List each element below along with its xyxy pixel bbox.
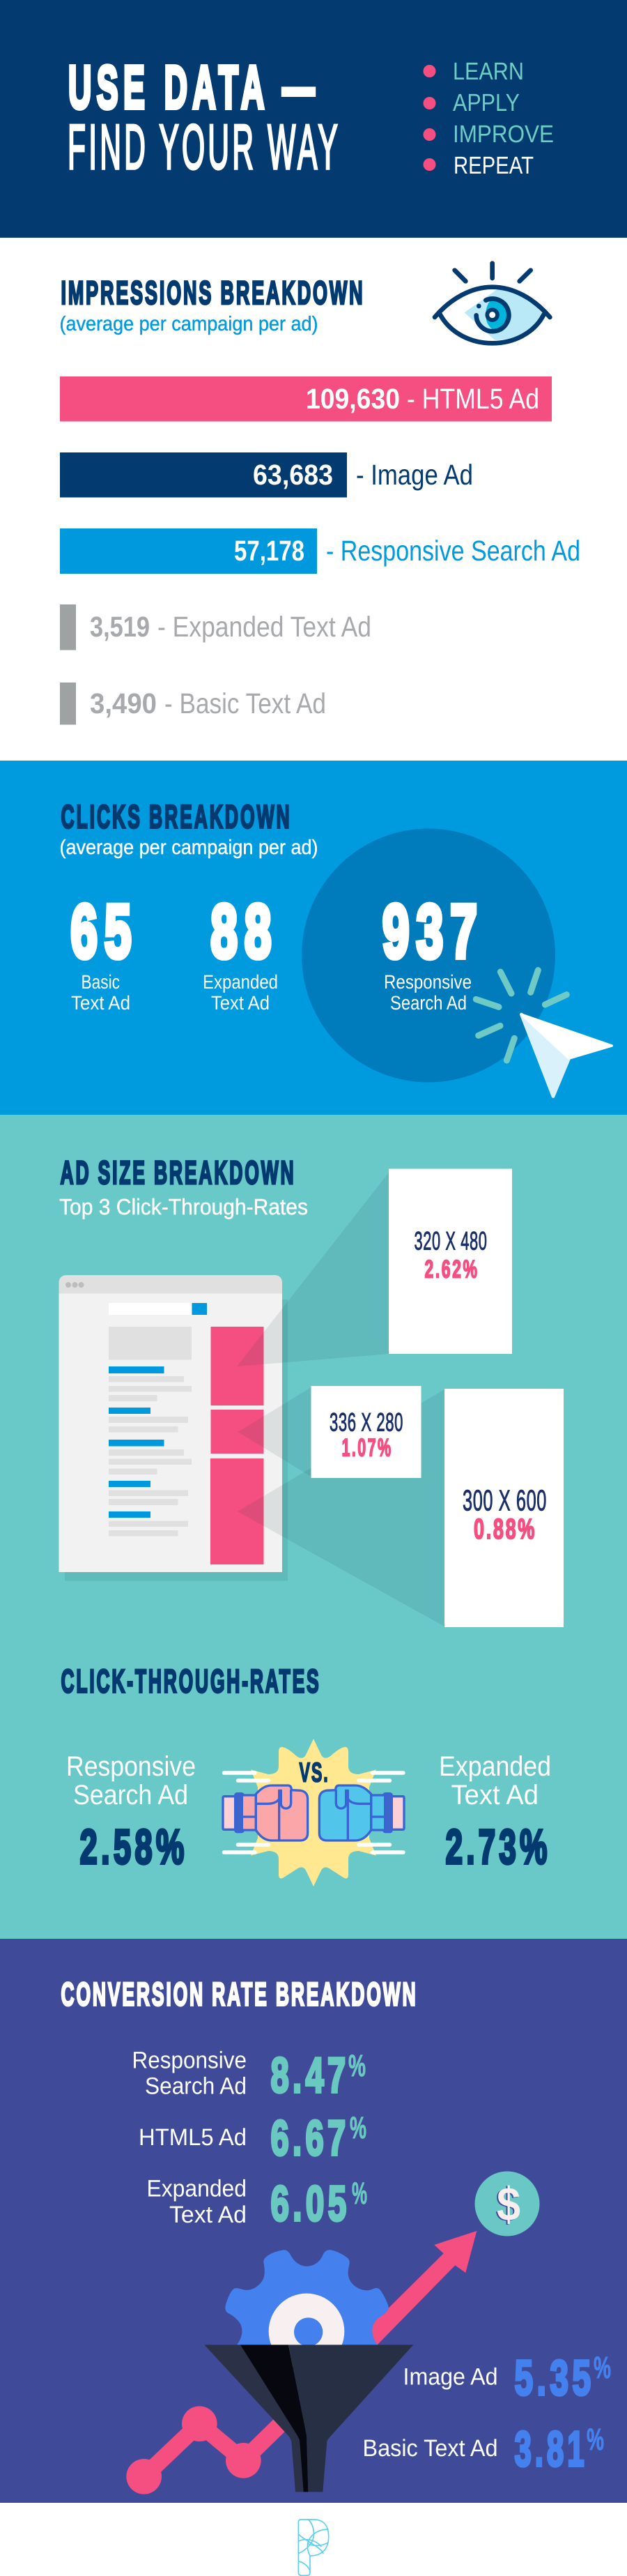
- stat: 65 Basic Text Ad: Basic: [81, 971, 120, 993]
- stat: 937 Responsive Search Ad: Responsive: [384, 971, 472, 993]
- icon: dollar coin: $: [497, 2178, 520, 2231]
- stat: 65 Basic Text Ad: 65: [71, 889, 138, 973]
- input line chart: [126, 2406, 286, 2494]
- funnel: [204, 2345, 413, 2492]
- highlight circle: [302, 828, 555, 1082]
- icon: versus boxing gloves: [223, 1739, 404, 1887]
- stat: Responsive Search Ad CTR: [66, 1751, 196, 1874]
- stat: Expanded Text Ad 6.05%: Expanded: [146, 2175, 247, 2202]
- bar: HTML5 Ad: - HTML5 Ad: [407, 383, 539, 415]
- ad card: 336 x 280: 1.07%: [341, 1433, 393, 1461]
- heading: ad size: AD SIZE BREAKDOWN: [60, 1154, 295, 1191]
- bullet list: LEARN: [453, 58, 524, 85]
- subheading: ad size: Top 3 Click-Through-Rates: [59, 1194, 308, 1219]
- speed lines: [224, 1773, 403, 1852]
- bar: Responsive Search Ad: - Responsive Search Ad: [326, 535, 580, 567]
- stat: 65 Basic Text Ad: Text Ad: [71, 992, 130, 1014]
- growth arrow: [372, 2231, 477, 2345]
- panel: impressions breakdown: [60, 264, 580, 725]
- stat: Image Ad 5.35%: Image Ad: [403, 2363, 497, 2390]
- illustration: funnel with gear and growth arrow: [126, 2231, 477, 2494]
- stat: HTML5 Ad 6.67%: %: [350, 2111, 366, 2145]
- bar: Basic Text Ad: - Basic Text Ad: [164, 687, 326, 719]
- right glove: [319, 1785, 404, 1840]
- ad card: 300 x 600: [444, 1389, 564, 1627]
- browser mockup: [59, 1275, 288, 1581]
- stat: Responsive Search Ad 8.47%: %: [348, 2049, 366, 2083]
- icon: cursor click: [476, 970, 612, 1097]
- stat: Expanded Text Ad CTR: Expanded: [439, 1751, 551, 1782]
- bar: Expanded Text Ad: - Expanded Text Ad: [157, 611, 371, 643]
- icon: dollar coin: $: [495, 2179, 519, 2232]
- bar: Responsive Search Ad: 57,178: [234, 535, 304, 567]
- stat: Responsive Search Ad 8.47%: 8.47: [270, 2048, 350, 2103]
- bullet list: REPEAT: [454, 152, 534, 179]
- ad card: 336 x 280: [311, 1386, 421, 1478]
- bar: HTML5 Ad: [60, 376, 552, 421]
- stat: Expanded Text Ad 6.05%: %: [352, 2177, 367, 2211]
- stat: Basic Text Ad 3.81%: %: [587, 2423, 604, 2457]
- bar: Basic Text Ad: [60, 683, 326, 725]
- panel: conversion rate breakdown: [0, 1939, 627, 2503]
- stat: 937 Responsive Search Ad: [382, 889, 484, 1014]
- stat: Basic Text Ad 3.81%: Basic Text Ad: [362, 2435, 497, 2462]
- stat: 65 Basic Text Ad: [71, 889, 138, 1014]
- subheading: clicks: (average per campaign per ad): [60, 837, 318, 859]
- left glove: [223, 1785, 308, 1840]
- ad card: 336 x 280: 336 X 280: [330, 1408, 403, 1436]
- logo: [298, 2520, 329, 2575]
- stat: Expanded Text Ad CTR: 2.73%: [446, 1820, 550, 1874]
- stat: 88 Expanded Text Ad: [203, 889, 279, 1014]
- stat: 88 Expanded Text Ad: Text Ad: [211, 992, 270, 1014]
- panel: ad size breakdown: [0, 1115, 627, 1939]
- stat: 937 Responsive Search Ad: 937: [382, 889, 484, 973]
- stat: HTML5 Ad 6.67%: 6.67: [270, 2111, 350, 2166]
- stat: Image Ad 5.35%: %: [594, 2351, 611, 2385]
- stat: Expanded Text Ad 6.05%: 6.05: [270, 2177, 350, 2232]
- VS label: VS.: [300, 1758, 329, 1788]
- icon: eye: [435, 264, 550, 343]
- ad card: 320 x 480: [389, 1168, 512, 1354]
- stat: 937 Responsive Search Ad: Search Ad: [390, 992, 467, 1014]
- icon: dollar coin: [475, 2171, 539, 2236]
- bullet list: [424, 58, 554, 179]
- bar: Expanded Text Ad: 3,519: [90, 611, 150, 643]
- bar: Image Ad: [60, 452, 473, 498]
- heading: impressions: IMPRESSIONS BREAKDOWN: [61, 274, 365, 311]
- subheading: impressions: (average per campaign per ad): [60, 313, 318, 335]
- stat: 88 Expanded Text Ad: Expanded: [203, 971, 278, 993]
- bar: Image Ad: - Image Ad: [356, 459, 473, 491]
- bullet list: APPLY: [453, 89, 520, 116]
- ad card: 300 x 600: 300 X 600: [463, 1484, 547, 1517]
- stat: Responsive Search Ad CTR: 2.58%: [79, 1820, 188, 1874]
- gear: [225, 2250, 389, 2369]
- ad card: 320 x 480: 320 X 480: [414, 1227, 488, 1255]
- stat: HTML5 Ad 6.67%: [139, 2111, 366, 2166]
- stat: Responsive Search Ad 8.47%: Search Ad: [145, 2073, 247, 2100]
- stat: Image Ad 5.35%: [403, 2351, 611, 2406]
- stat: Expanded Text Ad 6.05%: [146, 2175, 367, 2232]
- ad card: 320 x 480: 2.62%: [425, 1255, 479, 1283]
- stat: Basic Text Ad 3.81%: [362, 2422, 604, 2477]
- heading: click-through-rates: CLICK-THROUGH-RATES: [61, 1662, 320, 1700]
- stat: Expanded Text Ad CTR: Text Ad: [451, 1780, 539, 1811]
- bar: Basic Text Ad: 3,490: [90, 687, 157, 719]
- bar: HTML5 Ad: 109,630: [306, 383, 400, 415]
- bar: Expanded Text Ad: [60, 604, 371, 650]
- bar: Image Ad: 63,683: [253, 459, 333, 491]
- stat: Responsive Search Ad CTR: Responsive: [66, 1751, 196, 1782]
- burst: [251, 1739, 376, 1887]
- ad card: 300 x 600: 0.88%: [474, 1513, 536, 1545]
- stat: 88 Expanded Text Ad: 88: [210, 889, 279, 973]
- title line 1: USE DATA —: [68, 54, 320, 121]
- heading: clicks: CLICKS BREAKDOWN: [61, 798, 292, 835]
- stat: Responsive Search Ad 8.47%: [132, 2047, 366, 2103]
- bullet list: IMPROVE: [453, 121, 554, 148]
- stat: HTML5 Ad 6.67%: HTML5 Ad: [139, 2124, 247, 2151]
- panel: clicks breakdown: [0, 761, 627, 1115]
- stat: Expanded Text Ad 6.05%: Text Ad: [169, 2202, 247, 2228]
- panel: header: [0, 0, 627, 238]
- bar: Responsive Search Ad: [60, 528, 580, 574]
- stat: Responsive Search Ad 8.47%: Responsive: [132, 2047, 247, 2073]
- stat: Responsive Search Ad CTR: Search Ad: [73, 1780, 188, 1811]
- projection beams: [237, 1173, 444, 1626]
- stat: Expanded Text Ad CTR: [439, 1751, 551, 1874]
